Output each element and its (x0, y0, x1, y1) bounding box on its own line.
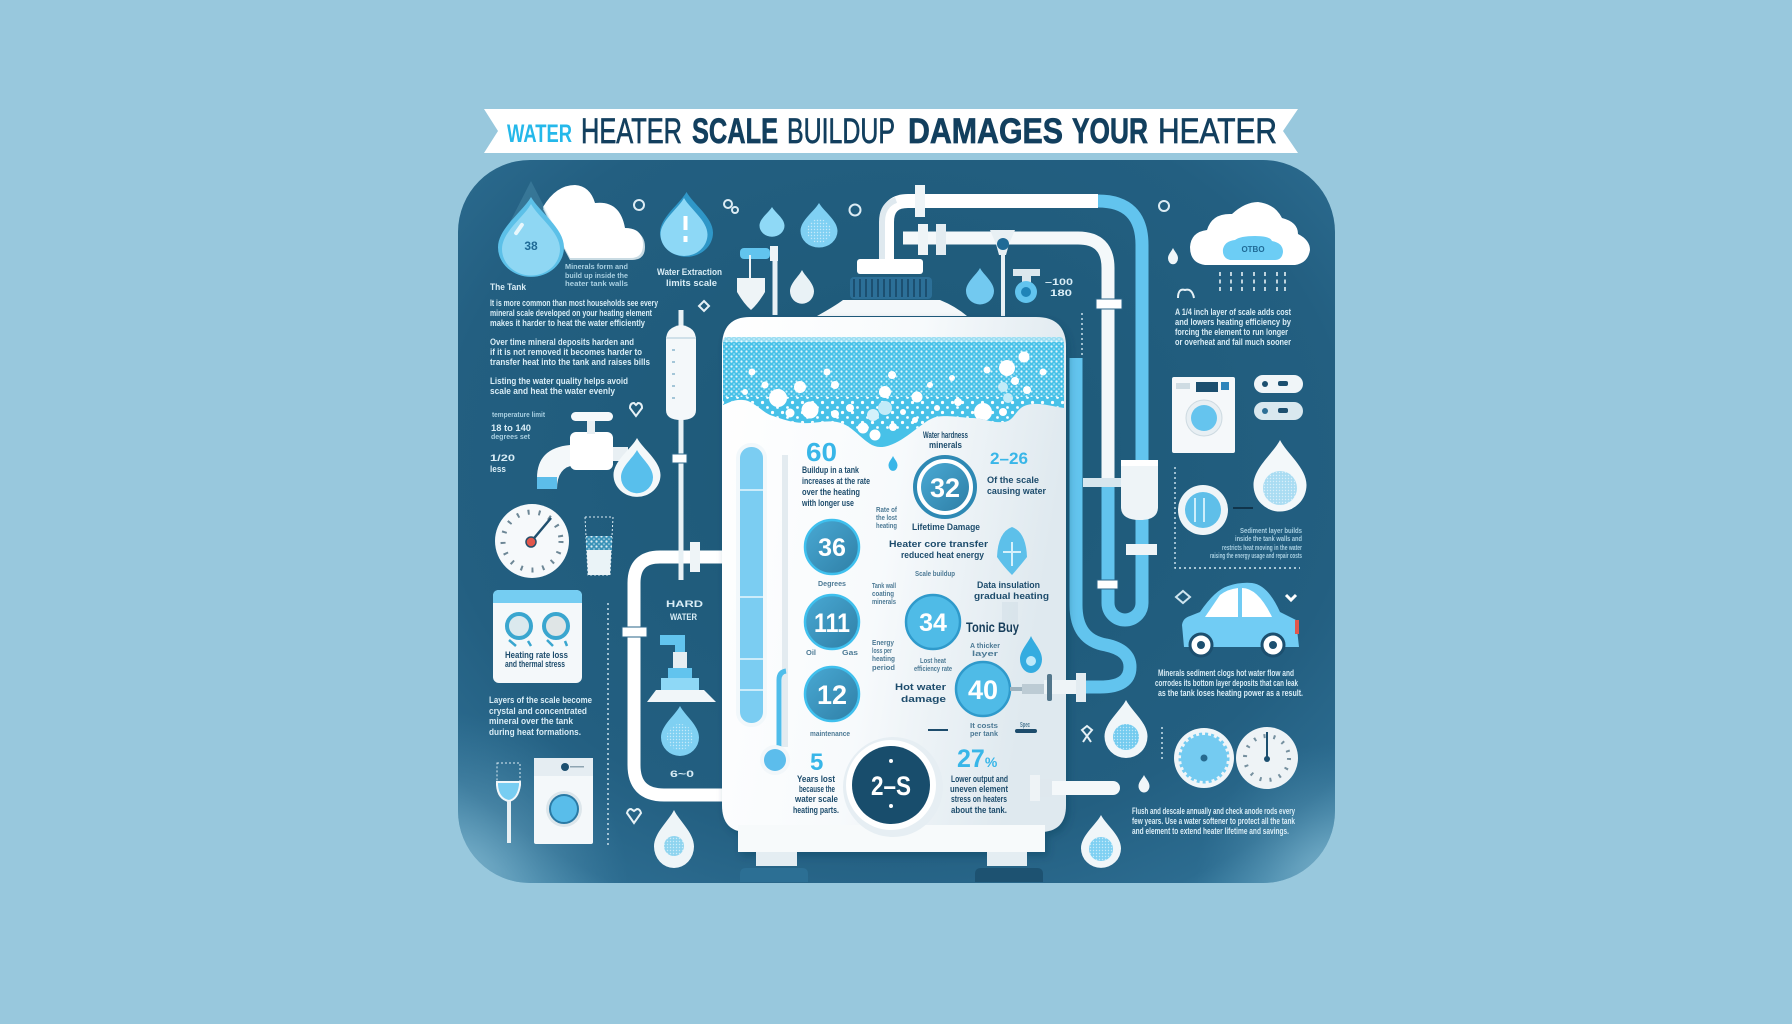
left text block: intro: The Tank (490, 282, 527, 292)
stat: 5: because the (799, 784, 835, 794)
stat: 60: increases at the rate (802, 476, 870, 486)
stat: 2-26 (987, 449, 1046, 496)
big water drop with 38 (498, 181, 564, 277)
icon: cloud right: OTBO (1241, 245, 1265, 254)
left small stats (490, 412, 546, 474)
data insulation text: gradual heating (974, 591, 1049, 601)
central dial (843, 737, 943, 837)
title banner: HEATER (581, 112, 682, 151)
icon: drop (1020, 636, 1042, 673)
icon: faucet (537, 412, 628, 489)
car side marks (1176, 591, 1296, 603)
icon: right mesh drop (1104, 700, 1148, 758)
stat circle: 111 (805, 595, 859, 657)
stat: 27 percent (950, 745, 1008, 815)
stat circle: 32: minerals (929, 440, 962, 450)
stat circle: 32: 32 (930, 473, 960, 503)
small column text: coating (872, 591, 894, 598)
small column text: the lost (876, 515, 898, 522)
icon: white scale drop (1254, 440, 1306, 512)
small column text: heating (876, 523, 897, 530)
icon: bottom drop right (1081, 815, 1121, 868)
left text block: lower: mineral over the tank (489, 716, 574, 726)
left text block: lower: crystal and concentrated (489, 706, 587, 716)
icon: control card: and thermal stress (505, 659, 565, 669)
right text block: bottom (1132, 806, 1296, 836)
left small stats: degrees set (491, 434, 531, 441)
small column text: Scale buildup (915, 571, 955, 578)
scale buildup band (720, 337, 1070, 452)
valve label: –100 (1045, 277, 1073, 287)
rain dots (1220, 272, 1285, 292)
stat circle: 111: 111 (814, 608, 850, 638)
right text block: upper: and lowers heating efficiency by (1175, 317, 1291, 327)
upper white pipe (887, 201, 1098, 260)
small column text: Energy (872, 640, 894, 647)
small caption under cloud: Minerals form and (565, 264, 628, 271)
left text block: intro: mineral scale developed on your heating element (490, 308, 652, 318)
icon: valve (990, 230, 1040, 303)
stat: 60: over the heating (802, 487, 860, 497)
small labels near 40: It costs (970, 723, 998, 730)
icon: pressure dial (1236, 727, 1298, 789)
small labels near 40: per tank (970, 731, 998, 738)
right small text: raising the energy usage and repair costs (1210, 553, 1302, 560)
title banner: DAMAGES (908, 112, 1063, 151)
small text (970, 643, 1000, 658)
stat circle: 36: Degrees (818, 581, 846, 588)
icon: mesh drop (661, 706, 699, 756)
left text block: intro: transfer heat into the tank and raises bills (490, 357, 650, 367)
heater core text: Heater core transfer (889, 539, 989, 549)
stat circle: 12: maintenance (810, 731, 850, 738)
left text block: intro: It is more common than most households see every (490, 298, 658, 308)
small column text: Rate of (876, 507, 898, 514)
dashed lines (608, 313, 1300, 848)
stat circle: 12 (805, 667, 859, 738)
label: hard water: HARD (666, 599, 704, 609)
title banner: SCALE (692, 112, 778, 151)
icon: round sensor (1178, 485, 1253, 535)
right text block: bottom: Flush and descale annually and check anode rods every (1132, 806, 1295, 816)
bottom right pipe stub (1030, 775, 1120, 801)
icon: washing machine left (534, 758, 593, 844)
stat circle: 111: Gas (842, 650, 858, 657)
stat circle: 111: Oil (806, 650, 816, 657)
title banner: BUILDUP (787, 112, 895, 151)
right text block: upper: or overheat and fail much sooner (1175, 337, 1291, 347)
title banner: HEATER (1158, 112, 1277, 151)
stat: 5: Years lost (797, 774, 835, 784)
title banner (484, 109, 1298, 153)
small column text: heating (872, 656, 895, 663)
small column text: period (872, 665, 895, 672)
stat: 27 percent: about the tank. (951, 805, 1007, 815)
s-curve blue pipe (1076, 358, 1130, 687)
stat: 2-26: 2–26 (990, 449, 1028, 468)
left text block: intro: Over time mineral deposits harden and (490, 337, 634, 347)
stat: 60: Buildup in a tank (802, 465, 860, 475)
icons: small top drops (760, 203, 1178, 793)
icon: gauge (495, 504, 569, 578)
left white loop pipe (634, 557, 725, 795)
stat circle: 34 (906, 595, 960, 649)
icon: faucet drop (614, 438, 660, 497)
data insulation text (974, 580, 1049, 624)
big water drop with 38: 38 (524, 239, 538, 253)
stat circle: 32 (912, 430, 980, 532)
left small stats: 18 to 140 (491, 423, 531, 433)
label: hard water (666, 599, 704, 622)
icon: car (1182, 583, 1299, 656)
right small text: Sediment layer builds (1240, 528, 1302, 535)
stat: 27 percent: 27% (957, 745, 998, 773)
small text: A thicker (970, 643, 1000, 650)
icon: shield (997, 527, 1027, 575)
heater core text: reduced heat energy (901, 550, 984, 560)
valve label (1045, 277, 1073, 298)
stat: 5: heating parts. (793, 805, 839, 815)
stat: 27 percent: stress on heaters (951, 794, 1007, 804)
small caption under cloud: heater tank walls (565, 281, 628, 288)
small column text: Tank wall (872, 583, 896, 590)
central dial: 2–S (871, 771, 911, 801)
stat circle: 40: Hot water (895, 682, 947, 692)
left text block: lower: Layers of the scale become (489, 695, 592, 705)
small caption under cloud (565, 264, 628, 288)
right text block: upper: forcing the element to run longer (1175, 327, 1288, 337)
left text block: intro: scale and heat the water evenly (490, 386, 615, 396)
right text block: upper: A 1/4 inch layer of scale adds cost (1175, 307, 1291, 317)
small caption under cloud: build up inside the (565, 273, 628, 280)
stat: 60 (801, 437, 870, 508)
data insulation text: Data insulation (977, 580, 1040, 590)
icon: cloud right (1190, 202, 1310, 265)
left text block: intro (490, 282, 658, 396)
right text block: car: Minerals sediment clogs hot water flow and (1158, 668, 1294, 678)
right text block: bottom: and element to extend heater lifetime and savings. (1132, 826, 1289, 836)
left small stats: 1/20 (490, 453, 515, 463)
stat circle: 12: 12 (817, 680, 847, 710)
stat circle: 36: 36 (818, 534, 846, 562)
stat: 5: 5 (810, 749, 823, 776)
right text block: bottom: few years. Use a water softener to protect all the tank (1132, 816, 1296, 826)
right small text: restricts heat moving in the water (1222, 545, 1302, 552)
filter cylinder on right pipe (1121, 460, 1158, 520)
small labels near 40 (928, 722, 1037, 738)
stat circle: 40 (895, 662, 1010, 716)
thermometer tube (736, 443, 767, 727)
cloud left (543, 185, 645, 260)
stat circle: 34: 34 (919, 609, 947, 637)
left text block: intro: makes it harder to heat the water efficiently (490, 318, 645, 328)
icon: capsule gauge (666, 325, 696, 420)
small drop (888, 456, 898, 471)
pipes behind the tank (634, 200, 1142, 795)
title banner: WATER (507, 120, 572, 148)
stat: 27 percent: uneven element (950, 784, 1008, 794)
stat: 5 (793, 749, 839, 815)
icon: gear dial (1174, 728, 1234, 788)
tank cap (817, 259, 967, 316)
small text: layer (972, 651, 998, 658)
left text block: lower: during heat formations. (489, 727, 581, 737)
left small stats: temperature limit (492, 412, 546, 419)
valve label: 180 (1050, 288, 1072, 298)
title banner: YOUR (1072, 112, 1148, 151)
label: hard water: WATER (670, 612, 697, 622)
right text block: car: corrodes its bottom layer deposits that can leak (1155, 678, 1299, 688)
stat circle: 32: Lifetime Damage (912, 522, 980, 532)
left text block: intro: if it is not removed it becomes harder to (490, 347, 642, 357)
stat circle: 40: 40 (968, 675, 998, 705)
caption: water extraction (657, 267, 722, 288)
small column text: minerals (872, 599, 896, 606)
icon: small tap and funnel (737, 246, 778, 310)
icon: funnel glass (497, 763, 520, 843)
stat circle: 36 (805, 520, 859, 588)
right text block: upper (1175, 307, 1291, 347)
stat: 2-26: causing water (987, 486, 1046, 496)
right small text (1210, 528, 1302, 560)
right text block: car: as the tank loses heating power as a result. (1158, 688, 1303, 698)
connector from 40 to pipe (1010, 673, 1086, 702)
left text block: intro: Listing the water quality helps avoid (490, 376, 628, 386)
icon: drop exclamation (660, 192, 713, 257)
lower white pipe (903, 238, 1108, 480)
stat: 27 percent: Lower output and (951, 774, 1008, 784)
icon: control card (493, 590, 582, 683)
heater core text (889, 539, 989, 560)
pipe clamps and tags (622, 185, 1157, 637)
stat: 60: 60 (806, 437, 837, 467)
panel: main dark blue rounded panel (458, 160, 1335, 883)
stat circle: 32: Water hardness (923, 430, 968, 440)
icon: control card: Heating rate loss (505, 650, 568, 660)
stat: 60: with longer use (801, 498, 854, 508)
decorative rings (634, 200, 1169, 216)
icon: filter tower (647, 635, 716, 702)
caption: water extraction: limits scale (666, 278, 717, 288)
diamonds and hearts (627, 290, 1194, 823)
small column text: Lost heat (920, 658, 947, 665)
water heater tank (722, 317, 1066, 852)
icon: glass (585, 517, 613, 575)
temperature gauge tube (760, 455, 790, 775)
stat: 2-26: Of the scale (987, 475, 1039, 485)
right text block: car (1155, 668, 1303, 698)
left small stats: less (490, 464, 506, 474)
stat circle: 40: damage (901, 694, 946, 704)
left text block: lower (489, 695, 592, 737)
icon: connector pills (1254, 375, 1303, 420)
label: tonic buy: Tonic Buy (966, 619, 1019, 635)
icon: bottom drop left (654, 810, 694, 868)
icon: washing machine right (1172, 377, 1235, 453)
small labels near 40: Spec (1020, 722, 1030, 729)
stat: 5: water scale (794, 794, 838, 804)
small column text: loss per (872, 648, 892, 655)
thin vertical pipes (678, 310, 684, 580)
small column text: efficiency rate (914, 666, 952, 673)
right blue outer pipe (1098, 201, 1142, 620)
tank feet (740, 852, 1043, 882)
small column text (872, 507, 955, 673)
caption: water extraction: Water Extraction (657, 267, 722, 277)
text: squiggle: 6~0 (670, 769, 694, 779)
right small text: inside the tank walls and (1235, 536, 1302, 543)
